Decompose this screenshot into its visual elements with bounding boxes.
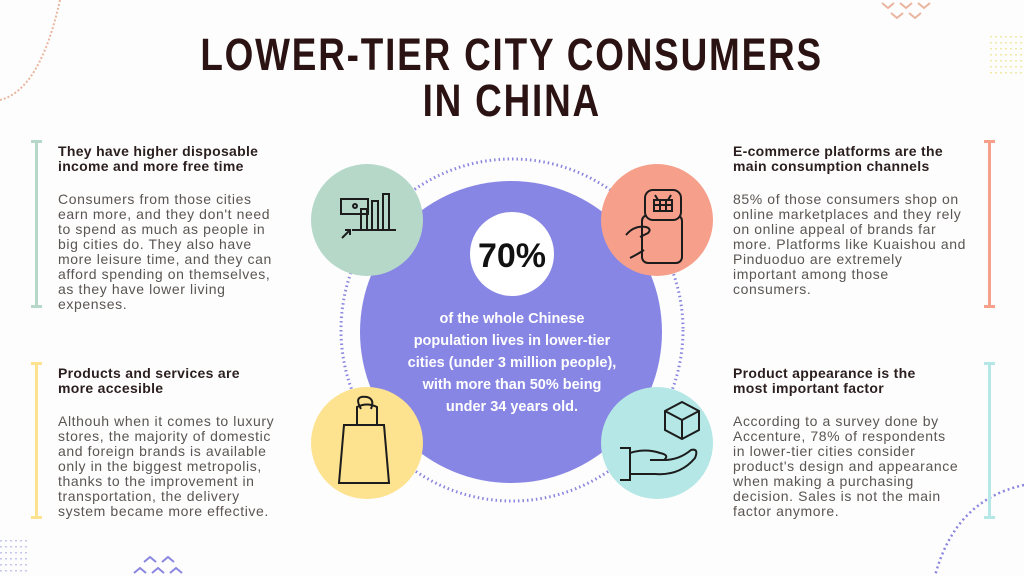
- title: IN CHINA: [423, 75, 601, 126]
- text block: 85% of those consumers shop on online marketplaces and they rely on online appeal of brands far more. Platforms like Kuaishou and Pinduoduo are extremely important among those consumers.: [733, 191, 966, 297]
- white circle with 70%: 70%: [478, 237, 546, 275]
- accent bar: [988, 140, 991, 308]
- text block: E-commerce platforms are the main consumption channels: [733, 143, 943, 174]
- panel: e-commerce: [733, 140, 995, 308]
- icon: shopping bag: [311, 387, 423, 499]
- dotted ring: [341, 159, 683, 501]
- text block: Althouh when it comes to luxury stores, the majority of domestic and foreign brands is available only in the biggest metropolis, thanks to the improvement in transportation, the delivery system became more effective.: [58, 413, 274, 519]
- icon: phone shopping: [601, 164, 713, 276]
- text block: According to a survey done by Accenture, 78% of respondents in lower-tier cities consider product's design and appearance when making a purchasing decision. Sales is not the main factor anymore.: [733, 413, 958, 519]
- text block: Consumers from those cities earn more, and they don't need to spend as much as people in big cities do. They also have more leisure time, and they can afford spending on themselves, as they have lower living expenses.: [58, 191, 272, 312]
- text block: [733, 143, 966, 297]
- text block: [58, 365, 274, 519]
- text block: They have higher disposable income and more free time: [58, 143, 258, 174]
- center text: with more than 50% being: [422, 377, 601, 393]
- accent bar: [35, 140, 38, 308]
- center text: cities (under 3 million people),: [408, 355, 616, 371]
- center text: of the whole Chinese: [439, 311, 585, 327]
- panel: disposable income: [31, 140, 272, 312]
- title: [201, 29, 823, 126]
- center text: under 34 years old.: [446, 399, 578, 415]
- panel: product appearance: [733, 362, 995, 519]
- text block: [733, 365, 958, 519]
- accent bar: [35, 362, 38, 519]
- icon: money growth chart: [311, 164, 423, 276]
- text block: Products and services are more accesible: [58, 365, 240, 396]
- center text: population lives in lower-tier: [414, 333, 611, 349]
- purple circle: [360, 181, 662, 483]
- text block: Product appearance is the most important factor: [733, 365, 916, 396]
- center graphic: [311, 158, 713, 502]
- white circle with 70%: [470, 212, 554, 296]
- center text: [408, 311, 616, 415]
- panel: accessibility: [31, 362, 274, 519]
- icon: hand with box: [601, 387, 713, 499]
- accent bar: [988, 362, 991, 519]
- title: LOWER-TIER CITY CONSUMERS: [201, 29, 823, 80]
